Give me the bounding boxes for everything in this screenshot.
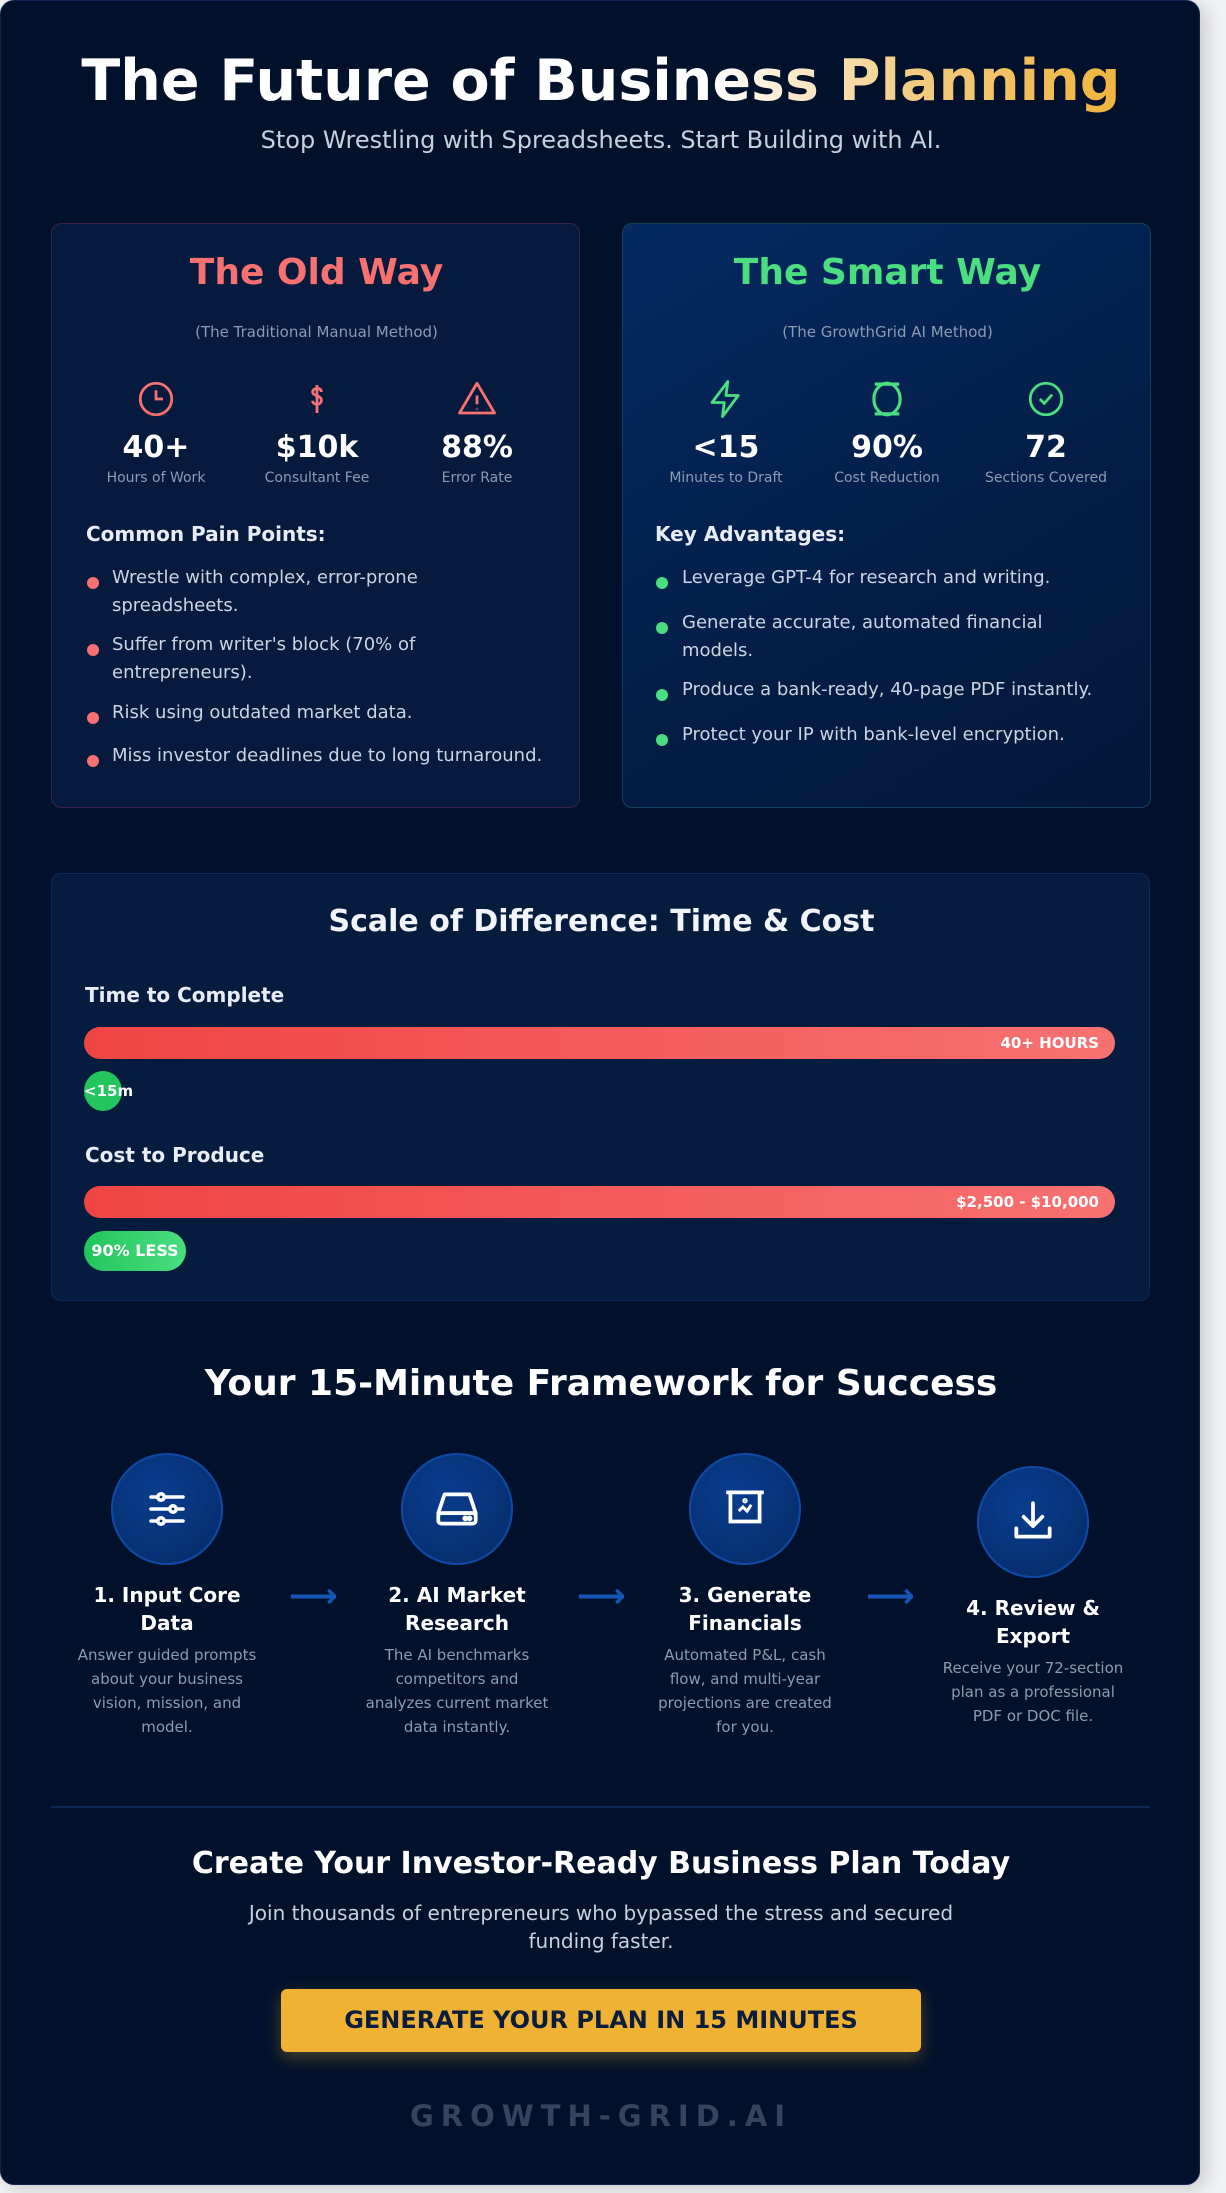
label: cost: Cost to Produce (85, 1143, 264, 1167)
pain points heading: Common Pain Points: (86, 522, 326, 546)
arrow 1: ⟶ (289, 1576, 338, 1616)
panel: scale of difference (51, 873, 1150, 1301)
subtitle: Stop Wrestling with Spreadsheets. Start Building with AI. (261, 126, 941, 154)
icon: dollar (311, 385, 323, 413)
CTA button: GENERATE YOUR PLAN IN 15 MINUTES (344, 2006, 858, 2034)
bar: cost new: 90% LESS (91, 1241, 179, 1260)
step 2 (366, 1453, 548, 1736)
smart way heading: The Smart Way (734, 252, 1041, 293)
stat: sections: Sections Covered (985, 470, 1107, 486)
stat: minutes (669, 380, 783, 486)
arrow 2: ⟶ (577, 1576, 626, 1616)
step 2: 2. AI Market Research (388, 1583, 526, 1635)
step 3 (658, 1453, 832, 1736)
CTA text: Join thousands of entrepreneurs who bypassed the stress and secured funding faster. (249, 1901, 953, 1953)
pain points list: Miss investor deadlines due to long turnaround. (112, 745, 542, 766)
pain points list: Wrestle with complex, error-prone spreadsheets. (112, 567, 418, 616)
bar: cost old (84, 1186, 1115, 1218)
panel: smart way (622, 223, 1151, 808)
pain points list: Suffer from writer's block (70% of entrepreneurs). (112, 634, 415, 683)
stat: error rate (441, 382, 513, 486)
stat: sections (985, 382, 1107, 486)
CTA button (281, 1989, 921, 2052)
step 2: The AI benchmarks competitors and analyzes current market data instantly. (366, 1646, 548, 1736)
icon: download (977, 1466, 1089, 1578)
step 3: Automated P&L, cash flow, and multi-year projections are created for you. (658, 1646, 832, 1736)
stat: cost reduction: 90% (851, 430, 923, 465)
stat: hours (107, 382, 206, 486)
pain points list (87, 567, 542, 767)
framework heading: Your 15-Minute Framework for Success (205, 1363, 997, 1404)
stat: hours: 40+ (123, 430, 189, 465)
step 3: 3. Generate Financials (679, 1583, 811, 1635)
step 1 (78, 1453, 256, 1736)
pain points list: Risk using outdated market data. (112, 702, 412, 723)
advantages list: Produce a bank-ready, 40-page PDF instantly. (682, 679, 1092, 700)
stat: hours: Hours of Work (107, 470, 205, 486)
stat: error rate: Error Rate (442, 470, 512, 486)
bar: time new (84, 1071, 122, 1111)
stat: minutes: Minutes to Draft (669, 470, 783, 486)
stat: sections: 72 (1025, 430, 1067, 465)
stat: cost reduction (834, 382, 940, 486)
icon: lightning (710, 380, 740, 418)
stat: minutes: <15 (693, 430, 759, 465)
icon: drive (401, 1453, 513, 1565)
step 4: 4. Review & Export (966, 1596, 1100, 1648)
panel: old way (51, 223, 580, 808)
icon: sliders (111, 1453, 223, 1565)
icon: check circle (1028, 382, 1064, 416)
bar: cost old: $2,500 - $10,000 (956, 1193, 1099, 1211)
scale heading: Scale of Difference: Time & Cost (329, 904, 874, 939)
icon: chart board (689, 1453, 801, 1565)
icon: clock (138, 382, 174, 416)
advantages heading: Key Advantages: (655, 522, 845, 546)
old way subtitle: (The Traditional Manual Method) (195, 323, 438, 341)
step 1: Answer guided prompts about your business vision, mission, and model. (78, 1646, 256, 1736)
step 1: 1. Input Core Data (93, 1583, 241, 1635)
label: time: Time to Complete (85, 983, 284, 1007)
smart way subtitle: (The GrowthGrid AI Method) (782, 323, 993, 341)
bar: time new: <15m (84, 1082, 133, 1100)
old way heading: The Old Way (190, 252, 443, 293)
icon: refresh (872, 382, 902, 416)
CTA heading: Create Your Investor-Ready Business Plan Today (192, 1846, 1010, 1881)
stat: fee (265, 385, 369, 486)
stat: fee: $10k (276, 430, 358, 465)
bar: time old (84, 1027, 1115, 1059)
advantages list: Protect your IP with bank-level encryption. (682, 724, 1065, 745)
advantages list (656, 567, 1092, 746)
footer brand: GROWTH-GRID.AI (410, 2099, 792, 2133)
step 4 (943, 1466, 1123, 1725)
advantages list: Leverage GPT-4 for research and writing. (682, 567, 1050, 588)
advantages list: Generate accurate, automated financial models. (682, 612, 1042, 661)
arrow 3: ⟶ (866, 1576, 915, 1616)
bar: time old: 40+ HOURS (1000, 1034, 1099, 1052)
step 4: Receive your 72-section plan as a professional PDF or DOC file. (943, 1659, 1123, 1725)
bar: cost new (84, 1231, 186, 1271)
icon: warning (458, 382, 496, 414)
stat: error rate: 88% (441, 430, 513, 465)
stat: fee: Consultant Fee (265, 470, 369, 486)
stat: cost reduction: Cost Reduction (834, 470, 940, 486)
title: The Future of Business Planning (81, 48, 1121, 114)
